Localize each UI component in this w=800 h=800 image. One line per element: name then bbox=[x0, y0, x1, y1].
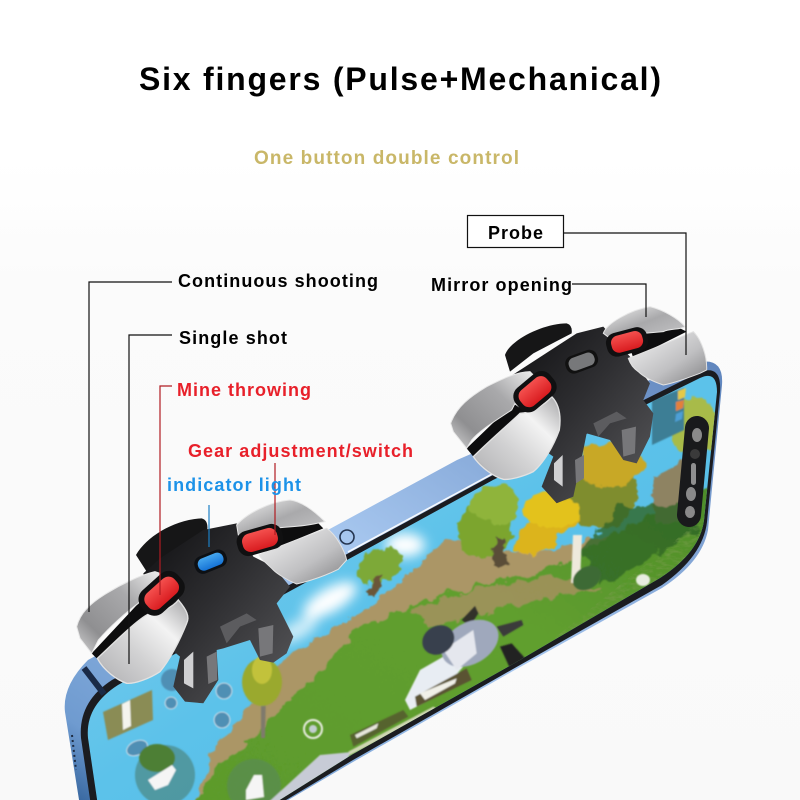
port ring bbox=[340, 530, 354, 544]
frame stripes bbox=[348, 473, 494, 552]
title: Six fingers (Pulse+Mechanical) bbox=[139, 61, 661, 97]
gap between right paddles bbox=[260, 522, 323, 552]
near tree bbox=[242, 656, 282, 738]
grey indicator button bbox=[563, 348, 600, 376]
phone bezel bbox=[81, 370, 720, 800]
upper right paddle bbox=[237, 500, 325, 537]
notch on right edge bbox=[685, 428, 702, 518]
rear pad bbox=[505, 323, 572, 372]
speaker dots bbox=[72, 735, 76, 770]
foliage bbox=[351, 397, 721, 596]
gap between right paddles bbox=[627, 327, 687, 358]
left trigger controller bbox=[77, 500, 347, 703]
hills bbox=[195, 536, 607, 800]
tree shadow bbox=[582, 505, 700, 585]
label: gear adjustment/switch: Gear adjustment/switch bbox=[188, 441, 413, 461]
brown hill on the right bbox=[650, 458, 682, 524]
small joystick marker bbox=[572, 566, 600, 591]
phone frame bbox=[65, 361, 722, 800]
phone bbox=[60, 360, 740, 800]
label: mirror opening: Mirror opening bbox=[431, 275, 572, 295]
HUD panels at top right bbox=[652, 388, 686, 445]
grenade marker bbox=[304, 720, 322, 738]
red button left bbox=[509, 366, 561, 417]
face chevron bbox=[593, 412, 627, 437]
label: indicator light bbox=[167, 475, 301, 547]
label: mine throwing: Mine throwing bbox=[177, 380, 311, 400]
label: single shot: Single shot bbox=[179, 328, 287, 348]
red button right bbox=[604, 325, 650, 359]
bottom HUD strip bbox=[260, 752, 352, 800]
lower left paddle bbox=[473, 397, 560, 479]
red button left bbox=[134, 566, 190, 621]
grip ribs bbox=[207, 652, 217, 684]
label: probe bbox=[468, 216, 686, 355]
label: mirror opening bbox=[431, 275, 646, 317]
rear pad bbox=[136, 518, 207, 572]
game screen bbox=[88, 376, 717, 800]
clouds bbox=[274, 533, 425, 649]
grass bbox=[185, 480, 730, 800]
lower right paddle bbox=[259, 528, 347, 584]
label: probe: Probe bbox=[488, 223, 543, 243]
label: continuous shooting: Continuous shooting bbox=[178, 271, 378, 291]
red button right bbox=[234, 521, 286, 559]
right trigger controller bbox=[451, 307, 707, 503]
gap between left paddles bbox=[92, 602, 157, 660]
frame corner band bbox=[84, 668, 104, 694]
dirt path bbox=[410, 575, 600, 628]
label: indicator light: indicator light bbox=[167, 475, 301, 495]
blue indicator button bbox=[192, 547, 229, 576]
gap between left paddles bbox=[467, 403, 530, 457]
HUD buttons bbox=[124, 669, 232, 759]
face chevron bbox=[220, 613, 257, 643]
upper right paddle bbox=[603, 307, 685, 338]
label: single shot bbox=[129, 328, 287, 664]
label: mine throwing bbox=[160, 380, 311, 595]
label: continuous shooting bbox=[89, 271, 378, 612]
subtitle: One button double control bbox=[254, 148, 519, 169]
grip ribs bbox=[622, 427, 636, 457]
body bbox=[510, 327, 653, 503]
lower left paddle bbox=[97, 600, 188, 683]
landscape bbox=[185, 397, 730, 800]
infographic canvas bbox=[64, 66, 722, 800]
HUD panel upper left bbox=[103, 690, 153, 740]
grass mottling bbox=[556, 518, 704, 638]
soldier bbox=[348, 606, 527, 755]
crouch and jump controls bbox=[135, 744, 281, 800]
upper left paddle bbox=[77, 572, 160, 653]
upper left paddle bbox=[451, 372, 533, 448]
trunk of yellow tree bbox=[571, 535, 582, 583]
lower right paddle bbox=[628, 332, 707, 385]
body bbox=[143, 523, 293, 703]
small bush icon bbox=[636, 574, 650, 586]
